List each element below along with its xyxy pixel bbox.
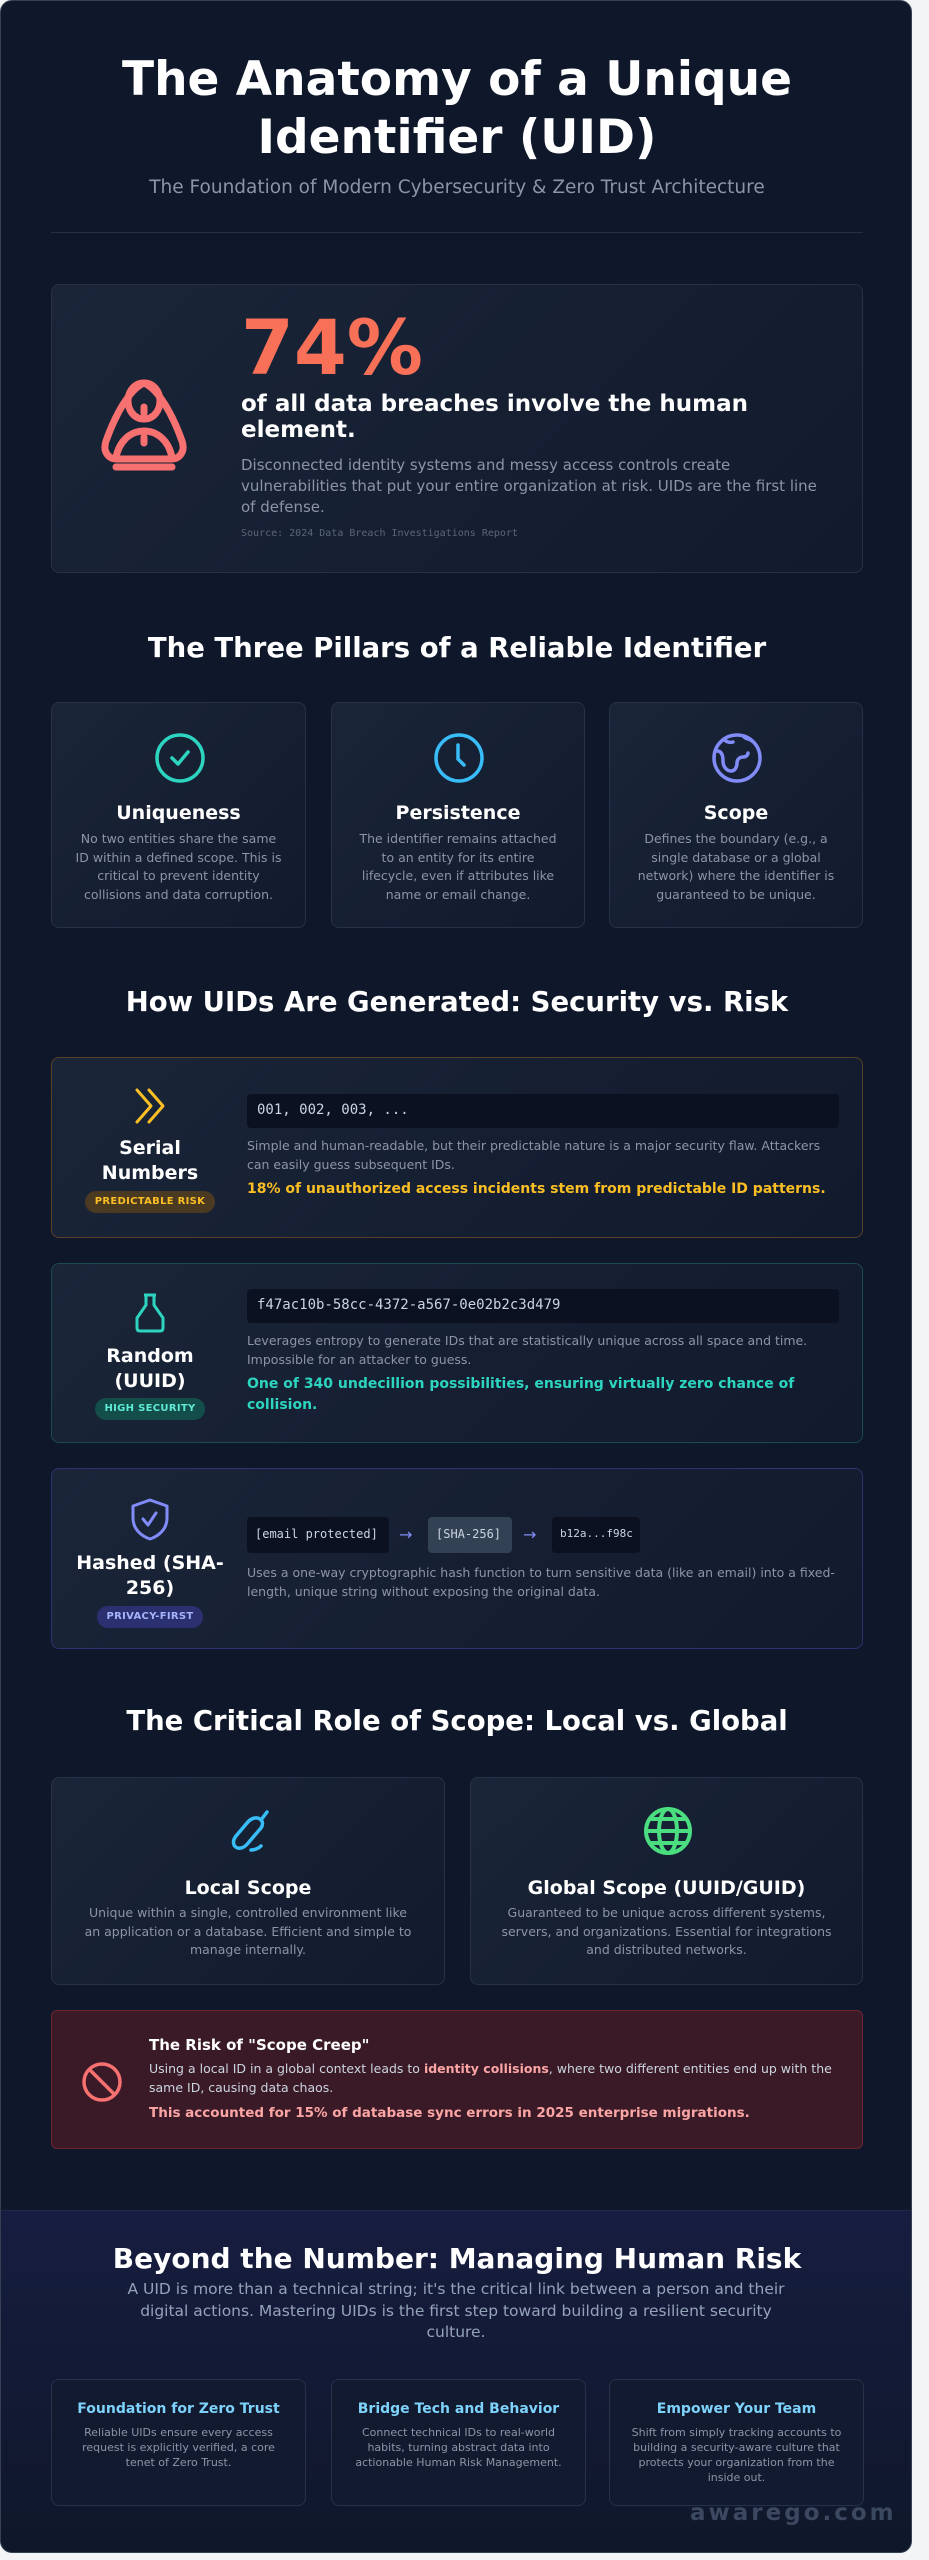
card: empower: Empower Your Team — [657, 2401, 816, 2417]
panel: serial numbers: Numbers — [102, 1162, 198, 1184]
panel: hashed — [51, 1468, 863, 1649]
stat: serial: 18% of unauthorized access incidents stem from predictable ID patterns. — [247, 1181, 826, 1197]
card: empower: Shift from simply tracking accounts to building a security-aware culture that protects your organization from the inside out. — [632, 2426, 841, 2484]
badge: high security: HIGH SECURITY — [104, 1403, 196, 1414]
watermark: awarego.com — [690, 2500, 897, 2526]
hash flow: b12a...f98c — [560, 1527, 633, 1540]
badge: predictable risk: PREDICTABLE RISK — [95, 1196, 205, 1207]
panel: uniqueness: Uniqueness — [116, 802, 241, 824]
panel: random uuid: Leverages entropy to generate IDs that are statistically unique across all space and time. Impossible for an attacker to guess. — [247, 1333, 807, 1367]
panel: serial numbers — [51, 1057, 863, 1238]
title — [122, 52, 792, 165]
title: Identifier (UID) — [258, 110, 656, 165]
code example: f47ac10b-58cc-4372-a567-0e02b2c3d479 — [257, 1297, 560, 1313]
hash flow: [email protected] — [255, 1527, 378, 1541]
hash flow: → — [523, 1525, 536, 1544]
panel: hashed: Hashed (SHA- — [76, 1552, 224, 1574]
panel: random uuid: Random — [106, 1345, 194, 1367]
icon: flask — [136, 1294, 164, 1332]
icon: prohibited — [82, 2062, 122, 2102]
panel: local scope — [51, 1777, 445, 1985]
hash flow: [SHA-256] — [436, 1527, 501, 1541]
callout: scope creep: The Risk of "Scope Creep" — [149, 2036, 369, 2054]
icon: clock — [434, 733, 484, 783]
stat body: Disconnected identity systems and messy access controls create vulnerabilities that put your entire organization at risk. UIDs are the first line of defense. — [241, 456, 817, 516]
card: bridge: Bridge Tech and Behavior — [358, 2401, 559, 2417]
card: zero trust — [51, 2379, 306, 2506]
heading: generation: How UIDs Are Generated: Security vs. Risk — [126, 986, 788, 1018]
panel: uniqueness — [51, 702, 306, 928]
code example: 001, 002, 003, ... — [257, 1102, 409, 1118]
panel: uniqueness: No two entities share the same ID within a defined scope. This is critical to prevent identity collisions and data corruption. — [76, 831, 281, 902]
card: zero trust: Foundation for Zero Trust — [77, 2401, 280, 2417]
badge: privacy first: PRIVACY-FIRST — [106, 1611, 194, 1622]
panel: random uuid — [51, 1263, 863, 1443]
icon: globe — [644, 1807, 692, 1855]
panel: global scope: Global Scope (UUID/GUID) — [528, 1877, 805, 1899]
panel: persistence: Persistence — [396, 802, 520, 824]
icon: person — [101, 380, 187, 470]
badge: privacy first — [97, 1606, 203, 1628]
code example — [247, 1094, 839, 1128]
panel: global scope: Guaranteed to be unique across different systems, servers, and organizations. Essential for integrations and distributed networks. — [501, 1905, 832, 1957]
callout: scope creep: Using a local ID in a global context leads to identity collisions, where two different entities end up with the same ID, causing data chaos. — [149, 2061, 832, 2095]
stat: uuid: One of 340 undecillion possibilities, ensuring virtually zero chance of collision. — [247, 1376, 794, 1413]
stat headline: of all data breaches involve the human element. — [241, 391, 748, 443]
source: Source: 2024 Data Breach Investigations Report — [241, 528, 518, 539]
panel: random uuid: (UUID) — [114, 1370, 186, 1392]
panel: scope: Defines the boundary (e.g., a single database or a global network) where the identifier is guaranteed to be unique. — [638, 831, 834, 902]
subtitle: The Foundation of Modern Cybersecurity & Zero Trust Architecture — [149, 177, 765, 198]
title: The Anatomy of a Unique — [122, 52, 792, 107]
hash flow: → — [399, 1525, 412, 1544]
badge: predictable risk — [85, 1191, 215, 1213]
card: zero trust: Reliable UIDs ensure every access request is explicitly verified, a core tenet of Zero Trust. — [82, 2426, 275, 2469]
panel: serial numbers: Serial — [119, 1137, 181, 1159]
heading: scope: The Critical Role of Scope: Local vs. Global — [126, 1705, 788, 1737]
badge: high security — [95, 1398, 205, 1420]
panel: global scope — [470, 1777, 863, 1985]
panel: local scope: Local Scope — [185, 1877, 311, 1899]
heading: three pillars: The Three Pillars of a Reliable Identifier — [148, 632, 766, 664]
stat number: 74% — [241, 303, 423, 392]
code example — [247, 1289, 839, 1323]
card: bridge: Connect technical IDs to real-world habits, turning abstract data into actionable Human Risk Management. — [355, 2426, 562, 2469]
callout: scope creep — [51, 2010, 863, 2149]
panel: serial numbers: Simple and human-readable, but their predictable nature is a major security flaw. Attackers can easily guess subsequent IDs. — [247, 1138, 820, 1172]
panel: beyond the number — [1, 2210, 913, 2554]
heading: managing human risk: Beyond the Number: Managing Human Risk — [113, 2242, 801, 2275]
intro paragraph: A UID is more than a technical string; it's the critical link between a person and their digital actions. Mastering UIDs is the first step toward building a resilient security culture. — [127, 2280, 785, 2341]
card: bridge — [331, 2379, 586, 2506]
card: empower — [609, 2379, 864, 2506]
icon: chevrons — [135, 1088, 164, 1124]
panel: persistence: The identifier remains attached to an entity for its entire lifecycle, even if attributes like name or email change. — [359, 831, 557, 902]
panel: hashed: 256) — [126, 1577, 174, 1599]
icon: globe — [712, 733, 762, 783]
panel: human element stat — [51, 284, 863, 573]
panel: scope: Scope — [704, 802, 768, 824]
stat: scope creep: This accounted for 15% of database sync errors in 2025 enterprise migrations. — [149, 2105, 750, 2121]
hash flow — [247, 1517, 640, 1553]
icon: link — [232, 1810, 269, 1852]
panel: local scope: Unique within a single, controlled environment like an application or a database. Efficient and simple to manage internally. — [85, 1905, 411, 1957]
panel: hashed: Uses a one-way cryptographic hash function to turn sensitive data (like an email) into a fixed-length, unique string without exposing the original data. — [247, 1565, 835, 1599]
panel: scope — [609, 702, 863, 928]
panel: persistence — [331, 702, 585, 928]
icon: shield check — [132, 1498, 168, 1540]
icon: check circle — [155, 733, 205, 783]
